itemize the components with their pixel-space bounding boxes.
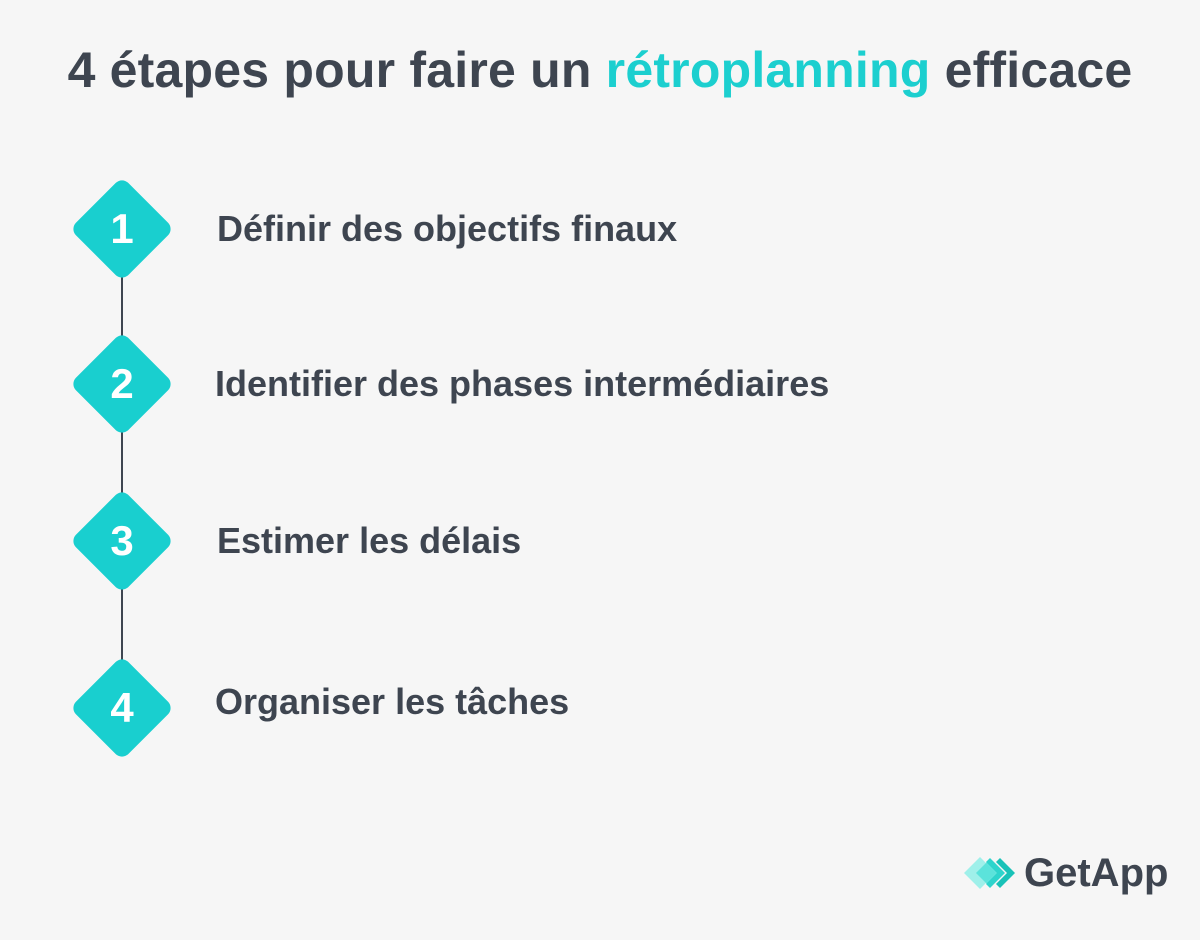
step 4: Organiser les tâches — [215, 681, 569, 722]
logo: GetApp: GetApp — [1024, 851, 1168, 895]
step 3: 3 — [110, 517, 134, 564]
title: 4 étapes pour faire un rétroplanning efficace — [68, 42, 1132, 98]
step 2: 2 — [110, 360, 134, 407]
step 2: Identifier des phases intermédiaires — [215, 363, 829, 404]
step 3 — [73, 492, 521, 590]
step 1: Définir des objectifs finaux — [217, 208, 677, 249]
step 3: Estimer les délais — [217, 520, 521, 561]
step 4 — [73, 659, 569, 757]
step 1 — [73, 180, 677, 278]
step 4: 4 — [110, 684, 134, 731]
step 1: 1 — [110, 205, 134, 252]
step 2 — [73, 335, 829, 433]
